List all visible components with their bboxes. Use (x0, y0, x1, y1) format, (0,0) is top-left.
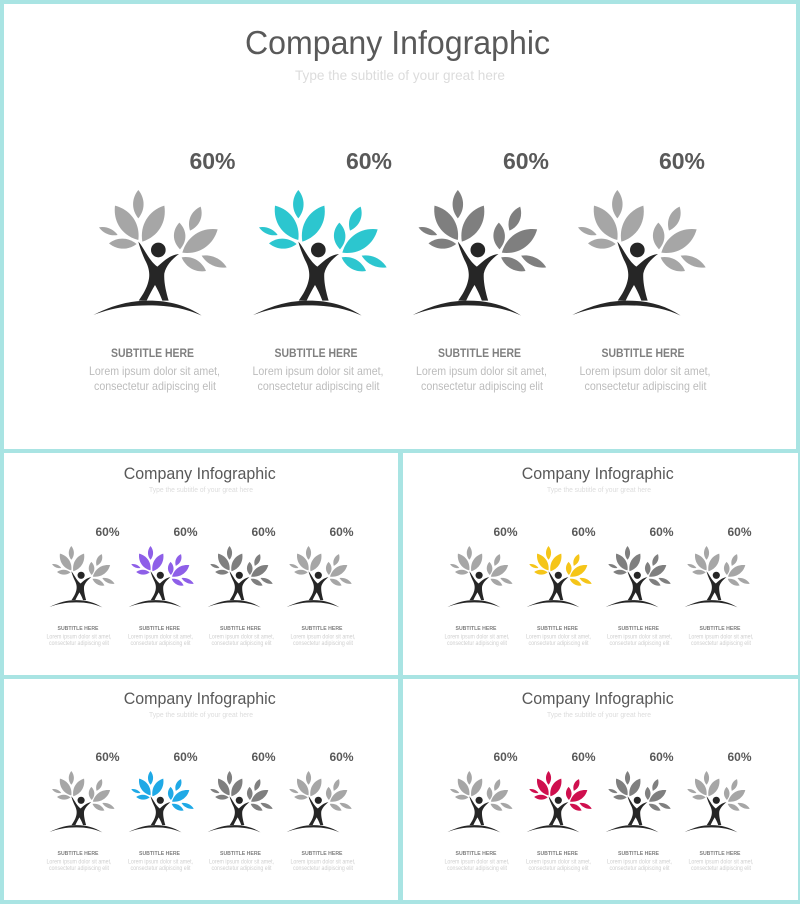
captions: Lorem ipsum dolor sit amet, (607, 634, 672, 640)
captions: SUBTITLE HERE (700, 626, 741, 632)
subtitle: Type the subtitle of your great here (547, 712, 651, 719)
captions: SUBTITLE HERE (220, 626, 261, 632)
captions: consectetur adipiscing elit (691, 641, 751, 647)
subtitle: Type the subtitle of your great here (149, 487, 253, 494)
column 1 (89, 148, 236, 393)
captions: SUBTITLE HERE (220, 851, 261, 857)
captions: consectetur adipiscing elit (49, 866, 109, 872)
percentages: 60% (95, 750, 120, 764)
captions: SUBTITLE HERE (618, 851, 659, 857)
captions: Lorem ipsum dolor sit amet, (128, 860, 193, 866)
column 4 (572, 148, 710, 393)
column 4: Lorem ipsum dolor sit amet, (580, 364, 710, 378)
panel: blue variant (4, 679, 398, 900)
percentages: 60% (727, 525, 752, 539)
captions: Lorem ipsum dolor sit amet, (526, 634, 591, 640)
percentages: 60% (649, 750, 674, 764)
captions: consectetur adipiscing elit (610, 866, 670, 872)
percentages: 60% (173, 750, 198, 764)
captions: SUBTITLE HERE (139, 851, 180, 857)
captions: SUBTITLE HERE (58, 851, 99, 857)
percentages: 60% (727, 750, 752, 764)
captions: consectetur adipiscing elit (528, 641, 589, 647)
captions: SUBTITLE HERE (58, 626, 99, 632)
percentages: 60% (493, 750, 518, 764)
captions: Lorem ipsum dolor sit amet, (128, 634, 193, 640)
column 3: Lorem ipsum dolor sit amet, (416, 364, 547, 378)
captions: consectetur adipiscing elit (130, 866, 191, 872)
panel: red variant (403, 679, 798, 900)
captions: consectetur adipiscing elit (130, 641, 191, 647)
title: Company Infographic (124, 464, 276, 483)
captions: consectetur adipiscing elit (212, 641, 272, 647)
subtitle: Type the subtitle of your great here (547, 487, 651, 494)
captions: consectetur adipiscing elit (212, 866, 272, 872)
captions: SUBTITLE HERE (302, 851, 343, 857)
captions: consectetur adipiscing elit (528, 866, 589, 872)
percentages: 60% (329, 525, 354, 539)
title: Company Infographic (245, 24, 550, 61)
percentages: 60% (251, 525, 276, 539)
captions: Lorem ipsum dolor sit amet, (688, 860, 754, 866)
percentages: 60% (571, 525, 596, 539)
captions: consectetur adipiscing elit (293, 866, 353, 872)
captions: consectetur adipiscing elit (293, 641, 353, 647)
captions (46, 851, 356, 872)
percentages: 60% (95, 525, 120, 539)
column 4: 60% (659, 148, 705, 174)
captions: SUBTITLE HERE (537, 851, 578, 857)
captions: Lorem ipsum dolor sit amet, (290, 860, 356, 866)
panel: purple variant (4, 453, 398, 675)
panel: main slide (4, 4, 796, 449)
captions: Lorem ipsum dolor sit amet, (46, 860, 112, 866)
captions: consectetur adipiscing elit (49, 641, 109, 647)
column 2: Lorem ipsum dolor sit amet, (252, 364, 384, 378)
percentages: 60% (173, 525, 198, 539)
captions: Lorem ipsum dolor sit amet, (607, 860, 672, 866)
captions: Lorem ipsum dolor sit amet, (290, 634, 356, 640)
captions: consectetur adipiscing elit (447, 641, 507, 647)
column 1: 60% (189, 148, 236, 174)
captions: SUBTITLE HERE (456, 626, 497, 632)
captions: SUBTITLE HERE (302, 626, 343, 632)
column 3 (413, 148, 549, 393)
captions: Lorem ipsum dolor sit amet, (209, 634, 274, 640)
percentages: 60% (493, 525, 518, 539)
captions: SUBTITLE HERE (700, 851, 741, 857)
captions: SUBTITLE HERE (139, 626, 180, 632)
captions: Lorem ipsum dolor sit amet, (688, 634, 754, 640)
tree icons (49, 546, 352, 607)
captions (444, 851, 754, 872)
percentages (95, 750, 354, 764)
column 3: consectetur adipiscing elit (421, 379, 544, 393)
panel: yellow variant (403, 453, 798, 675)
percentages: 60% (329, 750, 354, 764)
tree icons (447, 771, 750, 832)
captions: consectetur adipiscing elit (691, 866, 751, 872)
column 1: consectetur adipiscing elit (94, 379, 217, 393)
captions (46, 626, 356, 647)
column 4: consectetur adipiscing elit (584, 379, 707, 393)
column 4: SUBTITLE HERE (602, 348, 685, 360)
column 3: 60% (503, 148, 549, 174)
column 2: consectetur adipiscing elit (258, 379, 380, 393)
percentages: 60% (571, 750, 596, 764)
title: Company Infographic (522, 689, 674, 708)
column 2: SUBTITLE HERE (274, 348, 358, 360)
percentages: 60% (251, 750, 276, 764)
tree icons (447, 546, 750, 607)
captions: SUBTITLE HERE (456, 851, 497, 857)
title: Company Infographic (124, 689, 276, 708)
captions: Lorem ipsum dolor sit amet, (444, 634, 510, 640)
percentages (493, 750, 752, 764)
tree icons (49, 771, 352, 832)
column 2: 60% (346, 148, 392, 174)
column 1: Lorem ipsum dolor sit amet, (89, 364, 220, 378)
column 2 (252, 148, 392, 393)
subtitle: Type the subtitle of your great here (295, 67, 505, 83)
captions: SUBTITLE HERE (618, 626, 659, 632)
title: Company Infographic (522, 464, 674, 483)
column 3: SUBTITLE HERE (438, 348, 521, 360)
captions: consectetur adipiscing elit (447, 866, 507, 872)
captions: Lorem ipsum dolor sit amet, (209, 860, 274, 866)
captions: Lorem ipsum dolor sit amet, (444, 860, 510, 866)
captions: Lorem ipsum dolor sit amet, (46, 634, 112, 640)
captions (444, 626, 754, 647)
subtitle: Type the subtitle of your great here (149, 712, 253, 719)
captions: Lorem ipsum dolor sit amet, (526, 860, 591, 866)
percentages: 60% (649, 525, 674, 539)
percentages (493, 525, 752, 539)
captions: SUBTITLE HERE (537, 626, 578, 632)
percentages (95, 525, 354, 539)
column 1: SUBTITLE HERE (111, 348, 194, 360)
captions: consectetur adipiscing elit (610, 641, 670, 647)
